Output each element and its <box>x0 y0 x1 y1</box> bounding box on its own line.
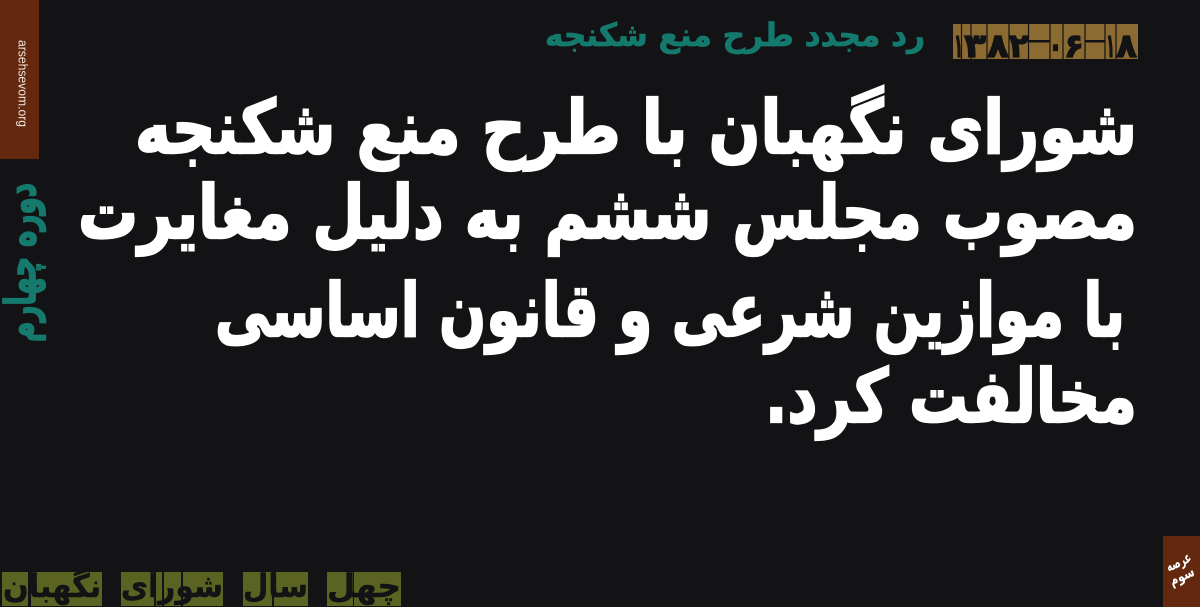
date tiles <box>953 24 1138 65</box>
series title text <box>3 567 401 605</box>
subheading: رد مجدد طرح منع شکنجه <box>545 16 925 54</box>
website label: arsehsevom.org <box>16 40 30 127</box>
logo tile <box>1160 536 1200 607</box>
date digits: ۶ <box>1064 26 1084 65</box>
series title text: نگهبان <box>3 567 101 605</box>
date digits: ۸ <box>1116 26 1137 65</box>
date digits: ۳ <box>964 26 986 65</box>
series title tiles <box>2 567 401 606</box>
date digits <box>954 26 1137 65</box>
series title text: شورای <box>121 567 223 605</box>
date digits: ۱ <box>1106 26 1115 65</box>
date digits: ۸ <box>987 26 1009 65</box>
series title text: چهل <box>327 567 401 605</box>
panel: website tab <box>0 0 39 159</box>
date digits: ۱ <box>954 26 963 65</box>
series title text: سال <box>243 567 308 605</box>
logo calligraphy <box>1160 548 1200 590</box>
date digits: ۲ <box>1009 26 1029 65</box>
main headline <box>78 85 1137 440</box>
date digits: ۰ <box>1048 26 1063 65</box>
